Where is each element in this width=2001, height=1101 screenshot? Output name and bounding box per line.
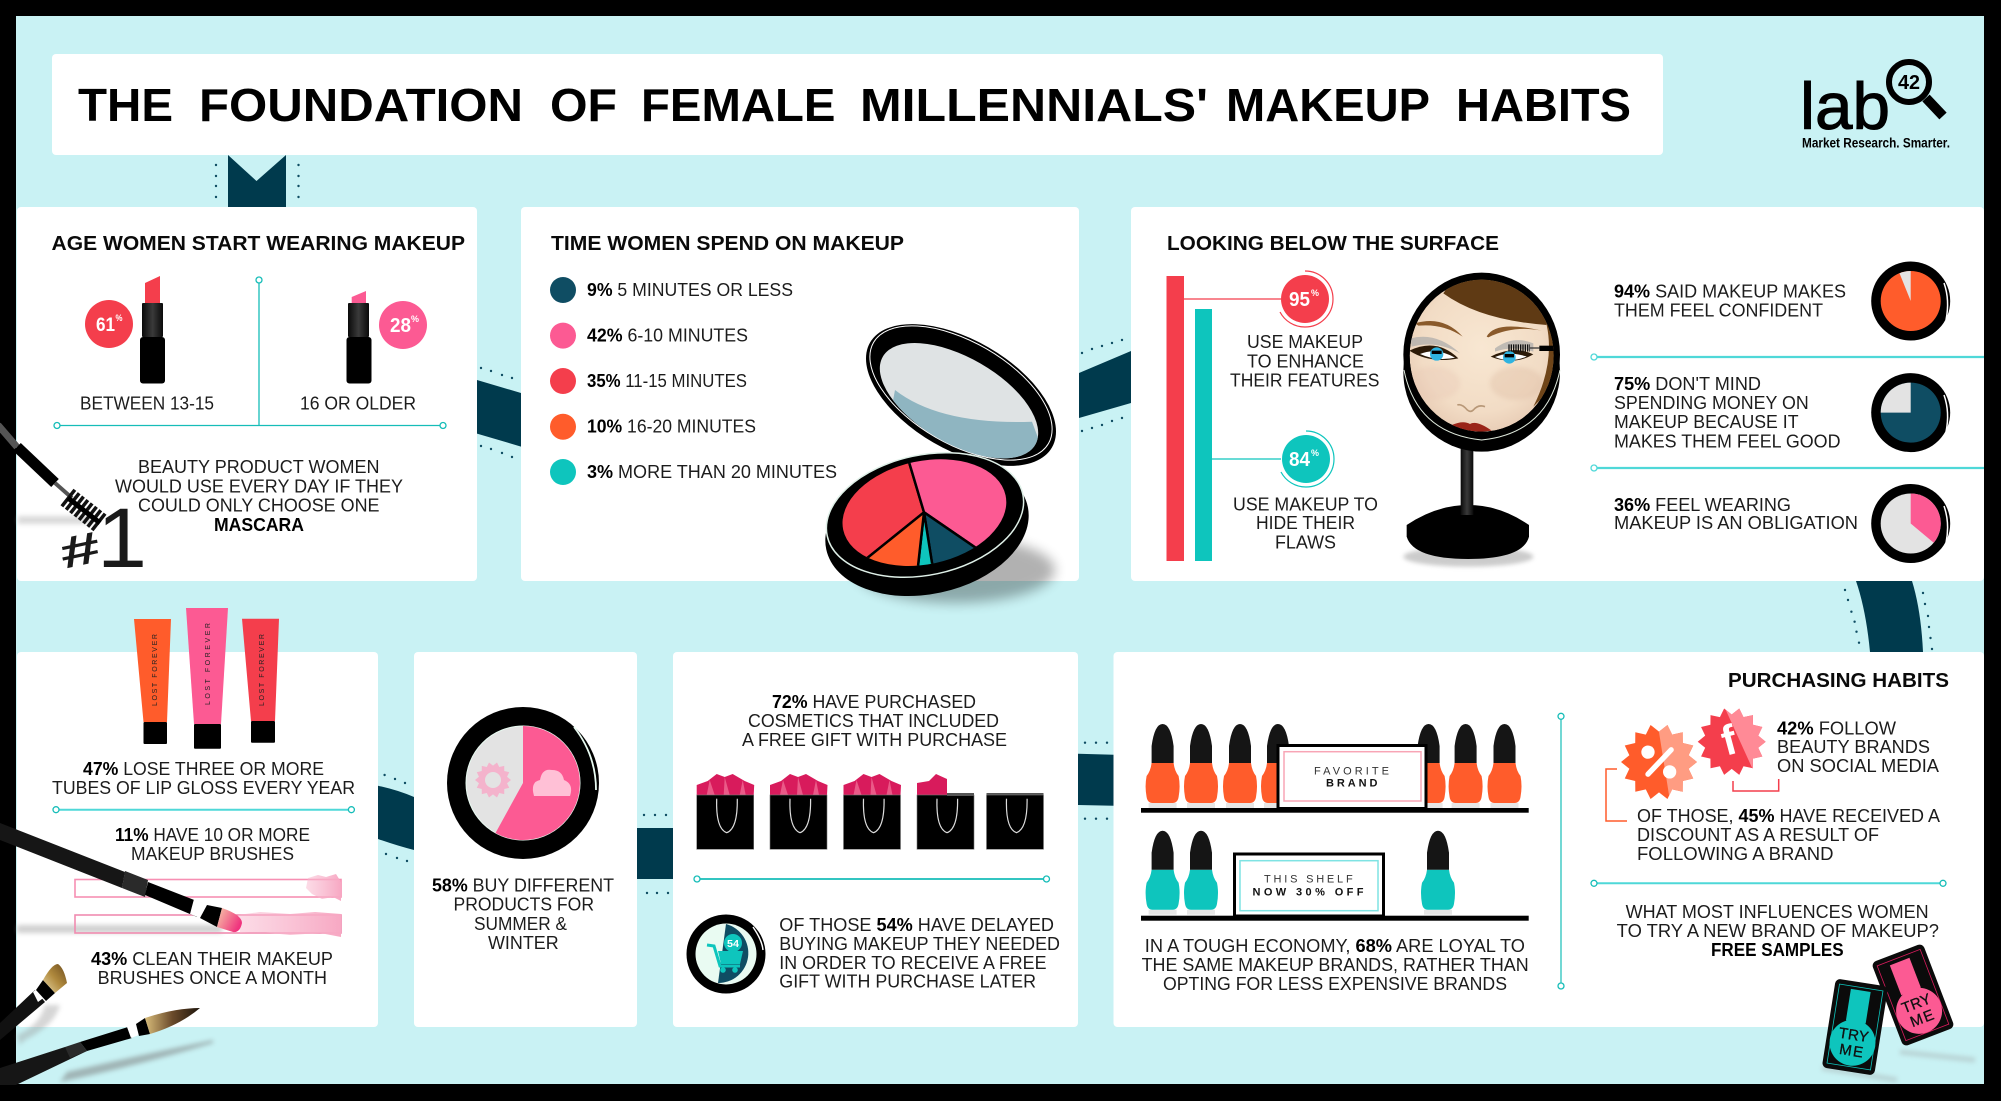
icon: 54% shopping cart ring: 54 — [727, 939, 739, 950]
icon: makeup brush and swatches — [0, 823, 341, 937]
badge: 84% — [1281, 431, 1334, 487]
panel: age women start wearing makeup — [0, 207, 477, 585]
badge: 95% — [1280, 271, 1333, 327]
text: 58% different products — [432, 876, 614, 953]
panel: free gift with purchase — [673, 652, 1078, 1027]
heading: looking below the surface: LOOKING BELOW THE SURFACE — [1167, 233, 1499, 255]
panel: looking below the surface — [1131, 207, 1984, 581]
text: 68% loyal: THE SAME MAKEUP BRANDS, RATHER THAN — [1142, 955, 1529, 975]
icon: lip gloss tubes — [134, 608, 279, 749]
text: 58% different products: PRODUCTS FOR — [454, 895, 594, 915]
text: 42% follow: 42% FOLLOW — [1777, 718, 1896, 738]
text: 58% different products: 58% BUY DIFFERENT — [432, 876, 614, 896]
badge: 84%: % — [1311, 448, 1319, 458]
icon: teal nail polish shelf — [1141, 831, 1529, 921]
text: 58% different products: WINTER — [488, 933, 559, 953]
icon: orange nail polish shelf — [1141, 724, 1529, 813]
text: beauty product mascara — [115, 457, 403, 535]
text: 45% discount — [1637, 806, 1940, 864]
vertical divider — [1558, 713, 1564, 989]
icon: 36% pie — [1871, 484, 1950, 563]
badge: 61%: % — [116, 313, 122, 323]
text: 45% discount: OF THOSE, 45% HAVE RECEIVED A — [1637, 806, 1940, 826]
connector ribbon: panel 1 to panel 2 — [477, 367, 521, 458]
text: hide flaws: HIDE THEIR — [1256, 513, 1355, 533]
text: beauty product mascara: MASCARA — [214, 515, 304, 535]
icon: orange nail polish shelf: FAVORITE — [1314, 765, 1389, 777]
icon: facebook badge — [1698, 709, 1766, 775]
icon: facebook badge: f — [1716, 715, 1743, 765]
text: hide flaws: FLAWS — [1275, 532, 1336, 552]
stat: 75% spending: MAKEUP BECAUSE IT — [1614, 412, 1799, 432]
title — [78, 79, 1631, 131]
stat: 94% confident: 94% SAID MAKEUP MAKES — [1614, 281, 1846, 301]
icon: teal nail polish shelf: NOW 30% OFF — [1252, 887, 1364, 899]
title: FEMALE — [641, 79, 836, 131]
icon: lip gloss tubes: LOST FOREVER — [205, 623, 212, 705]
stat: 36% obligation — [1614, 495, 1858, 533]
stat: 75% spending: MAKES THEM FEEL GOOD — [1614, 431, 1840, 451]
icon: shopping bags chart — [697, 774, 1044, 849]
badge: 95%: 95 — [1289, 289, 1310, 311]
text: 43% clean brushes: 43% CLEAN THEIR MAKEUP — [91, 949, 333, 969]
callout brackets — [1606, 769, 1779, 821]
text: 45% discount: DISCOUNT AS A RESULT OF — [1637, 825, 1879, 845]
text: 54% delayed: BUYING MAKEUP THEY NEEDED — [779, 934, 1060, 954]
bar chart: 95 and 84 percent — [1166, 276, 1281, 561]
stat: 75% spending: SPENDING MONEY ON — [1614, 393, 1809, 413]
title: HABITS — [1456, 79, 1631, 131]
text: 42% follow — [1777, 718, 1939, 776]
text: free samples: TO TRY A NEW BRAND OF MAKEUP? — [1617, 921, 1939, 941]
divider lines — [54, 277, 446, 428]
text: 47% lip gloss — [52, 759, 355, 798]
icon: pink lipstick — [346, 291, 372, 384]
icon: percent badge — [1621, 725, 1697, 799]
stat: 75% spending — [1614, 374, 1840, 451]
legend: time categories: 35% 11-15 MINUTES — [587, 371, 747, 391]
text: 58% different products: SUMMER & — [474, 914, 567, 934]
connector ribbon: top row to purchasing habits — [1844, 581, 1933, 652]
text: free samples — [1617, 902, 1939, 960]
heading: time: TIME WOMEN SPEND ON MAKEUP — [551, 233, 904, 255]
badge: 61%: 61 — [96, 315, 115, 336]
text: 11% brushes: 11% HAVE 10 OR MORE — [115, 825, 310, 845]
heading: age: AGE WOMEN START WEARING MAKEUP — [52, 233, 465, 255]
icon: 75% pie — [1871, 373, 1950, 452]
text: 43% clean brushes: BRUSHES ONCE A MONTH — [98, 968, 327, 988]
text: 72% free gift: 72% HAVE PURCHASED — [772, 692, 976, 712]
icon: mascara wand with number one: 1 — [97, 491, 147, 585]
text: 54% delayed — [779, 915, 1060, 992]
icon: mascara wand with number one — [0, 425, 147, 585]
text: enhance features — [1230, 332, 1380, 390]
text: 47% lip gloss: 47% LOSE THREE OR MORE — [83, 759, 324, 779]
icon: mascara wand with number one: # — [55, 522, 105, 579]
text: 72% free gift — [742, 692, 1007, 750]
title banner — [52, 54, 1663, 155]
badge: 28%: 28 — [390, 315, 411, 337]
text: hide flaws — [1233, 494, 1378, 552]
divider line — [1591, 880, 1946, 886]
icon: angled brushes — [0, 964, 213, 1085]
icon: red lipstick — [140, 276, 165, 384]
text: free samples: WHAT MOST INFLUENCES WOMEN — [1626, 902, 1929, 922]
stat: 75% spending: 75% DON'T MIND — [1614, 374, 1761, 394]
text: 72% free gift: A FREE GIFT WITH PURCHASE — [742, 730, 1007, 750]
logo: lab42: lab — [1800, 69, 1890, 143]
icon: try me sample cards: TRY — [1899, 991, 1933, 1017]
connector ribbon: panel 2 to panel 3 — [1079, 339, 1131, 432]
text: 11% brushes: MAKEUP BRUSHES — [131, 844, 294, 864]
panel: seasonal products — [414, 652, 637, 1027]
divider lines — [1591, 354, 1984, 471]
divider line — [53, 807, 354, 813]
icon: lip gloss tubes: LOST FOREVER — [152, 634, 159, 706]
text: 68% loyal — [1142, 936, 1529, 994]
badge: 28%: % — [411, 314, 419, 324]
text: 54% delayed: GIFT WITH PURCHASE LATER — [779, 972, 1036, 992]
text: beauty product mascara: COULD ONLY CHOOSE ONE — [138, 496, 380, 516]
badge: 61% — [85, 300, 133, 348]
icon: compact pie chart — [825, 324, 1061, 610]
logo: lab42: 42 — [1898, 72, 1920, 94]
text: 11% brushes — [115, 825, 310, 864]
panel: lip gloss and brushes — [0, 608, 378, 1085]
text: enhance features: TO ENHANCE — [1247, 351, 1364, 371]
text: 54% delayed: OF THOSE 54% HAVE DELAYED — [779, 915, 1054, 935]
text: 68% loyal: OPTING FOR LESS EXPENSIVE BRANDS — [1163, 974, 1507, 994]
text: free samples: FREE SAMPLES — [1711, 940, 1844, 960]
title: FOUNDATION — [199, 79, 523, 131]
text: 72% free gift: COSMETICS THAT INCLUDED — [748, 711, 999, 731]
icon: orange nail polish shelf: BRAND — [1326, 778, 1378, 790]
icon: 58% compact pie — [447, 707, 599, 859]
title: MAKEUP — [1226, 79, 1430, 131]
legend: time categories: 42% 6-10 MINUTES — [587, 325, 748, 345]
stat: 94% confident: THEM FEEL CONFIDENT — [1614, 300, 1823, 320]
legend: time categories — [550, 277, 837, 485]
icon: try me sample cards: TRY — [1838, 1025, 1870, 1046]
icon: try me sample cards: ME — [1838, 1041, 1864, 1061]
stat: 36% obligation: MAKEUP IS AN OBLIGATION — [1614, 513, 1858, 533]
legend: time categories: 9% 5 MINUTES OR LESS — [587, 280, 793, 300]
text: enhance features: USE MAKEUP — [1247, 332, 1363, 352]
badge: 95%: % — [1311, 288, 1319, 298]
text: beauty product mascara: WOULD USE EVERY DAY IF THEY — [115, 476, 403, 496]
badge: 28% — [379, 301, 427, 349]
label: 16 or older: 16 OR OLDER — [300, 394, 416, 414]
logo: lab42 — [1800, 62, 1950, 151]
badge: 84%: 84 — [1289, 449, 1311, 471]
icon: try me sample cards: ME — [1908, 1007, 1936, 1031]
heading: purchasing habits: PURCHASING HABITS — [1728, 670, 1949, 692]
stat: 36% obligation: 36% FEEL WEARING — [1614, 495, 1791, 515]
connector ribbon: panel 4 to panel 5 — [378, 774, 414, 862]
connector ribbon: panel 6 to panel 7 — [1078, 742, 1114, 820]
text: 54% delayed: IN ORDER TO RECEIVE A FREE — [779, 953, 1046, 973]
text: 47% lip gloss: TUBES OF LIP GLOSS EVERY YEAR — [52, 778, 355, 798]
text: 43% clean brushes — [91, 949, 333, 988]
legend: time categories: 3% MORE THAN 20 MINUTES — [587, 462, 837, 482]
text: 42% follow: ON SOCIAL MEDIA — [1777, 756, 1939, 776]
text: enhance features: THEIR FEATURES — [1230, 370, 1380, 390]
title: MILLENNIALS' — [860, 79, 1208, 131]
label: between 13-15: BETWEEN 13-15 — [80, 394, 214, 414]
title: OF — [550, 79, 617, 131]
stat: 94% confident — [1614, 281, 1846, 320]
text: 45% discount: FOLLOWING A BRAND — [1637, 844, 1834, 864]
text: hide flaws: USE MAKEUP TO — [1233, 494, 1378, 514]
icon: 54% shopping cart ring — [686, 914, 766, 994]
icon: try me sample cards — [1822, 943, 1975, 1080]
text: 42% follow: BEAUTY BRANDS — [1777, 737, 1930, 757]
panel: purchasing habits — [1114, 652, 1984, 1080]
connector ribbon: panel 5 to panel 6 — [637, 814, 673, 894]
icon: teal nail polish shelf: THIS SHELF — [1264, 873, 1353, 885]
divider line — [694, 876, 1050, 882]
title: THE — [78, 79, 173, 131]
icon: mirror with face — [1403, 273, 1560, 567]
legend: time categories: 10% 16-20 MINUTES — [587, 416, 756, 436]
logo: lab42: Market Research. Smarter. — [1802, 136, 1950, 151]
text: 68% loyal: IN A TOUGH ECONOMY, 68% ARE LOYAL TO — [1145, 936, 1525, 956]
text: beauty product mascara: BEAUTY PRODUCT WOMEN — [138, 457, 380, 477]
icon: lip gloss tubes: LOST FOREVER — [259, 634, 266, 706]
panel: time women spend on makeup — [521, 207, 1079, 620]
icon: 94% pie — [1871, 262, 1950, 340]
connector ribbon: title to age panel — [215, 155, 300, 207]
